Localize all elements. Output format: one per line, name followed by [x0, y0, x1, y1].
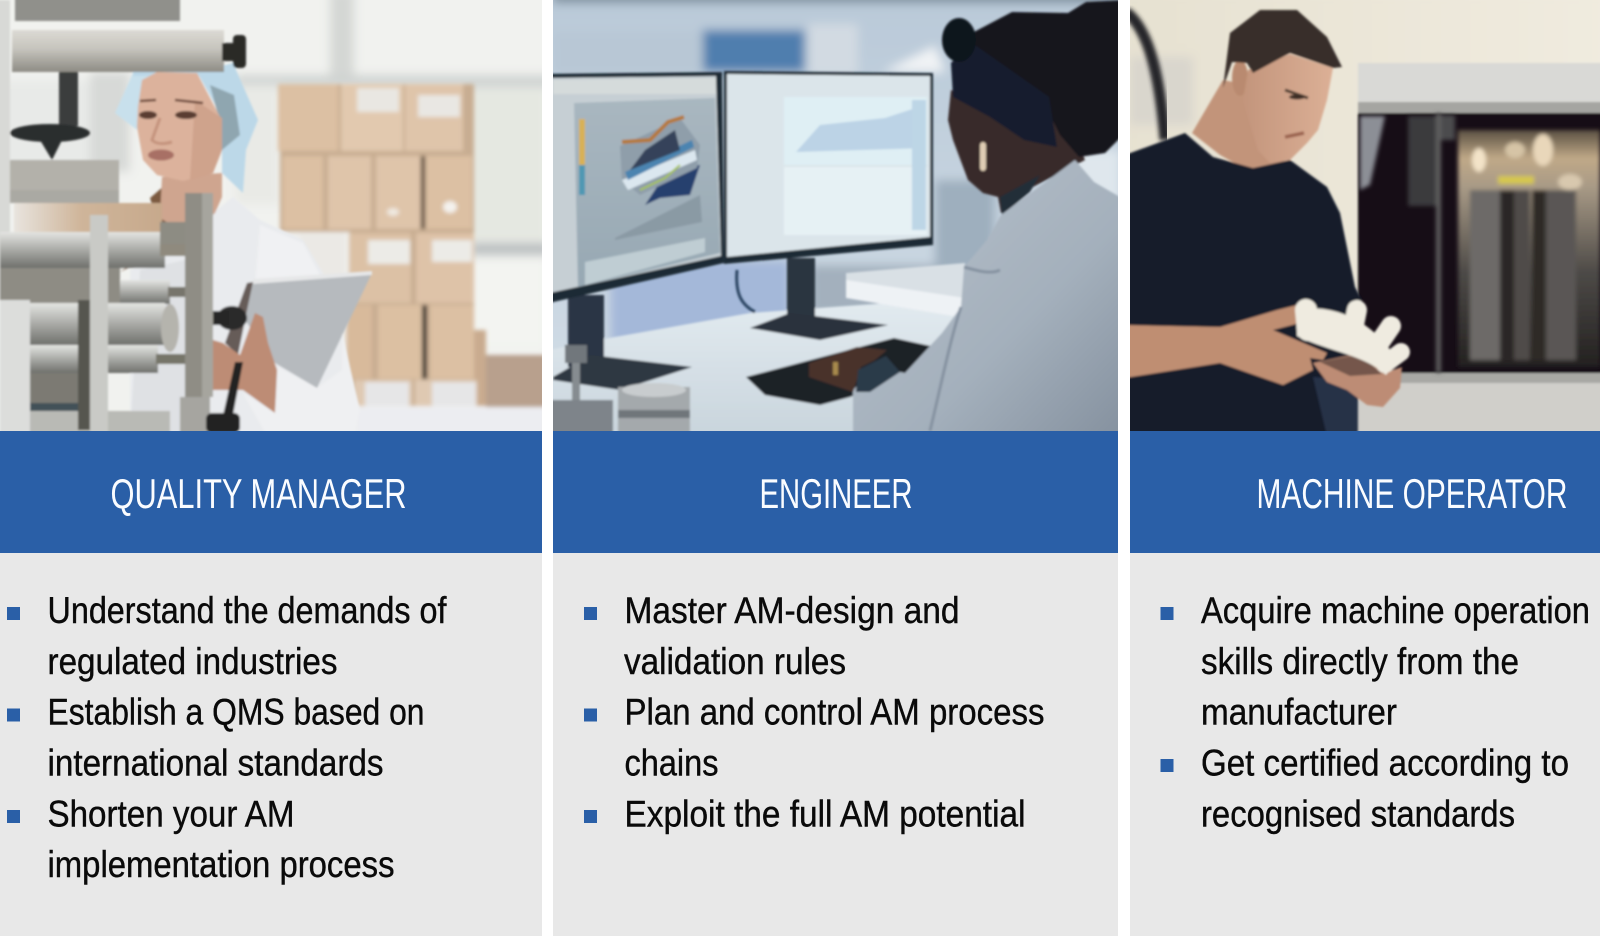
- hair: [1223, 10, 1342, 88]
- neck: [1192, 80, 1285, 170]
- cable: [737, 270, 755, 312]
- bullet item: regulated industries: [7, 590, 447, 682]
- hand: [809, 347, 887, 392]
- 3D part on left monitor: [620, 117, 700, 205]
- reflection: [1360, 116, 1385, 190]
- headband: [951, 43, 1057, 147]
- metal parts: [572, 360, 580, 408]
- bullet item: process chains: Plan and control AM process: [624, 692, 1044, 733]
- bullet item: AM implementation: [7, 793, 394, 885]
- header band: engineer: [553, 431, 1118, 553]
- jacket: [853, 160, 1125, 440]
- bullet item: AM design: [584, 590, 960, 682]
- coat: [130, 228, 320, 431]
- lower hand: [1313, 353, 1402, 407]
- bullet item: regulated industries: Understand the demands of: [48, 590, 447, 631]
- white tray: [846, 263, 965, 300]
- bullet item: AM implementation: Shorten your AM: [48, 793, 294, 834]
- lit chamber: [1458, 130, 1600, 367]
- bullet item: machine skills: skills directly from the: [1201, 641, 1519, 682]
- bullet item: QMS: [7, 692, 424, 784]
- bullet item: regulated industries: regulated industries: [48, 641, 338, 682]
- boxes row 5: [354, 380, 412, 406]
- nose and lips: [152, 118, 172, 144]
- body panel: engineer: [553, 553, 1118, 936]
- tan roll: [14, 203, 162, 233]
- hair: [973, 0, 1118, 158]
- bullet item: process chains: [584, 692, 1044, 784]
- boxes row 4: [346, 305, 372, 379]
- header band: machine operator: [1130, 431, 1600, 553]
- right monitor: [724, 71, 933, 264]
- photo: operator holding printed part: [1120, 0, 1600, 441]
- left monitor: [540, 72, 724, 305]
- bullet item: machine skills: [1160, 590, 1590, 733]
- photo: engineer at dual monitors: [540, 0, 1130, 440]
- brows and eyes: [140, 100, 203, 103]
- earring: [980, 142, 986, 171]
- keyboard: [746, 338, 935, 405]
- bullet item: process chains: chains: [624, 742, 718, 784]
- panel: engineer: [540, 0, 1130, 936]
- hairnet: [197, 63, 258, 193]
- blue shadow below hand: [1313, 377, 1358, 436]
- bullet item: AM potential: Exploit the full AM potential: [624, 793, 1026, 834]
- body panel: quality manager: [0, 553, 542, 936]
- neck: [159, 172, 224, 224]
- bullet item: certification: recognised standards: [1201, 793, 1515, 834]
- hair behind neck: [120, 185, 170, 272]
- floor: [485, 406, 542, 408]
- box stack backing: [280, 84, 474, 406]
- tablet: [245, 273, 372, 388]
- back of head and neck: [948, 90, 1085, 213]
- bullet item: certification: [1160, 742, 1569, 834]
- boxes row 3: [300, 233, 344, 303]
- hand holding tablet: [213, 313, 277, 413]
- ear: [1232, 60, 1248, 96]
- bullet item: QMS: Establish a QMS based on: [48, 692, 424, 733]
- body panel: machine operator: [1130, 553, 1600, 936]
- machine top: [15, 0, 180, 21]
- boxes row 2: [283, 156, 323, 229]
- printer housing: [1358, 63, 1600, 103]
- brown box right: [486, 355, 546, 407]
- panel: quality manager: [0, 0, 560, 936]
- header band: quality manager: [0, 431, 542, 553]
- shirt: [1125, 133, 1362, 436]
- brow, eye, mouth: [1285, 90, 1308, 98]
- stands: [787, 258, 815, 320]
- face: [137, 72, 222, 181]
- header band: quality manager: QUALITY MANAGER: [110, 470, 406, 517]
- photo: quality manager with tablet in packaging plant: [0, 0, 560, 440]
- bullet item: certification: Get certified according to: [1201, 742, 1569, 784]
- arm and hand: [1125, 305, 1327, 385]
- turtleneck: [1000, 175, 1040, 215]
- desk: [553, 302, 954, 431]
- bullet item: AM design: Master AM-design and: [624, 590, 960, 631]
- boxes row 1: [278, 84, 338, 151]
- knob and lever: [217, 306, 247, 330]
- bullet item: AM design: validation rules: [624, 641, 846, 682]
- lower machine: [0, 232, 165, 268]
- plate: [184, 192, 204, 398]
- bullet item: machine skills: manufacturer: [1201, 692, 1397, 733]
- printed part: [1306, 310, 1401, 364]
- coat sleeve: [243, 333, 360, 436]
- bullet item: AM implementation: implementation process: [48, 844, 394, 885]
- panel: machine operator: [1120, 0, 1600, 936]
- face: [1243, 54, 1333, 163]
- bullet item: QMS: international standards: [48, 742, 384, 784]
- header band: engineer: ENGINEER: [760, 470, 912, 517]
